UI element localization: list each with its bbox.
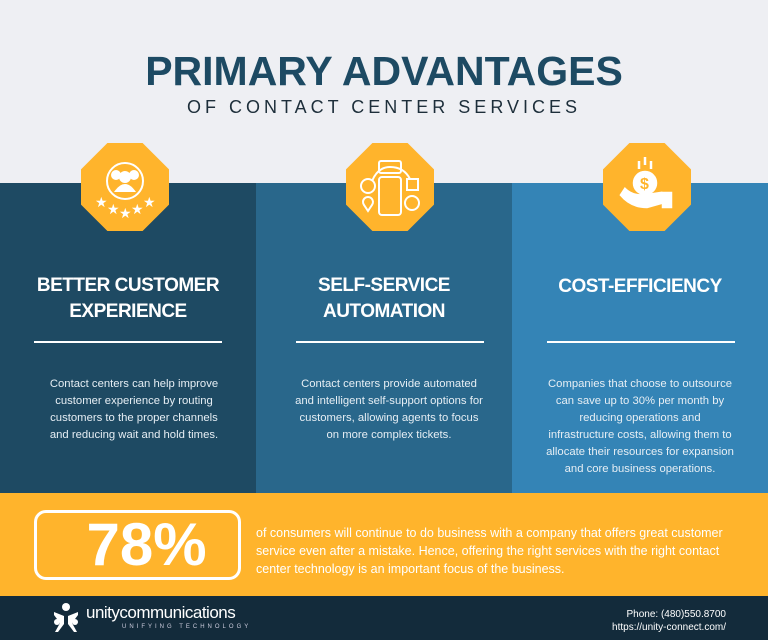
text: col1: customer experience by routing bbox=[55, 395, 213, 407]
logo: unitycommunications bbox=[86, 603, 235, 622]
panel: better customer experience bbox=[0, 183, 256, 494]
icon: customer rating: ★ bbox=[95, 195, 108, 211]
text: col3: infrastructure costs, allowing them to bbox=[548, 429, 732, 441]
stat text: of consumers will continue to do business with a company that offers great customer service even after a mistake. Hence, offering the right services with the right contact center technology is an important focus of the business. bbox=[256, 526, 723, 576]
heading: cost-efficiency: COST-EFFICIENCY bbox=[558, 276, 722, 297]
icon: customer rating: ★ bbox=[131, 202, 144, 218]
text: col3: can save up to 30% per month by bbox=[556, 395, 724, 407]
heading: self-service automation bbox=[318, 275, 450, 322]
text: col1 bbox=[50, 378, 218, 441]
contact info bbox=[612, 609, 726, 633]
icon: customer rating bbox=[81, 143, 169, 231]
icon: customer rating: ★ bbox=[143, 195, 156, 211]
text: col3 bbox=[546, 378, 734, 475]
text: col1: Contact centers can help improve bbox=[50, 378, 218, 390]
stat box: 78%: 78% bbox=[86, 511, 207, 578]
subtitle: OF CONTACT CENTER SERVICES bbox=[187, 97, 581, 117]
logo bbox=[54, 603, 251, 632]
text: col1: customers to the proper channels bbox=[50, 412, 218, 424]
text: col1: and reducing wait and hold times. bbox=[50, 429, 218, 441]
heading: better customer experience bbox=[37, 275, 220, 322]
title: PRIMARY ADVANTAGES bbox=[145, 48, 623, 94]
text: col2 bbox=[295, 378, 483, 441]
panel: self-service automation bbox=[256, 183, 512, 494]
heading: better customer experience: BETTER CUSTOMER bbox=[37, 275, 219, 296]
panel: cost-efficiency bbox=[512, 183, 768, 494]
text: col3: reducing operations and bbox=[579, 412, 701, 424]
text: col2: and intelligent self-support options for bbox=[295, 395, 483, 407]
icon: money hand bbox=[603, 143, 691, 231]
text: col3: and core business operations. bbox=[565, 463, 715, 475]
heading: self-service automation: AUTOMATION bbox=[323, 301, 445, 322]
text: col2: on more complex tickets. bbox=[327, 429, 451, 441]
icon: customer rating: ★ bbox=[119, 206, 132, 222]
stat band bbox=[0, 493, 768, 596]
icon: automation phone bbox=[346, 143, 434, 231]
stat box: 78% bbox=[34, 510, 241, 580]
text: col2: Contact centers provide automated bbox=[301, 378, 477, 390]
contact info: https://unity-connect.com/ bbox=[612, 622, 726, 633]
heading: better customer experience: EXPERIENCE bbox=[69, 301, 187, 322]
logo: UNIFYING TECHNOLOGY bbox=[122, 624, 251, 630]
footer bbox=[0, 596, 768, 640]
icon: customer rating: ★ bbox=[107, 202, 120, 218]
text: col3: Companies that choose to outsource bbox=[548, 378, 732, 390]
heading: self-service automation: SELF-SERVICE bbox=[318, 275, 450, 296]
contact info: Phone: (480)550.8700 bbox=[626, 609, 726, 620]
text: col2: customers, allowing agents to focus bbox=[300, 412, 478, 424]
icon: money hand: $ bbox=[640, 176, 649, 193]
text: col3: allocate their resources for expansion bbox=[546, 446, 734, 458]
